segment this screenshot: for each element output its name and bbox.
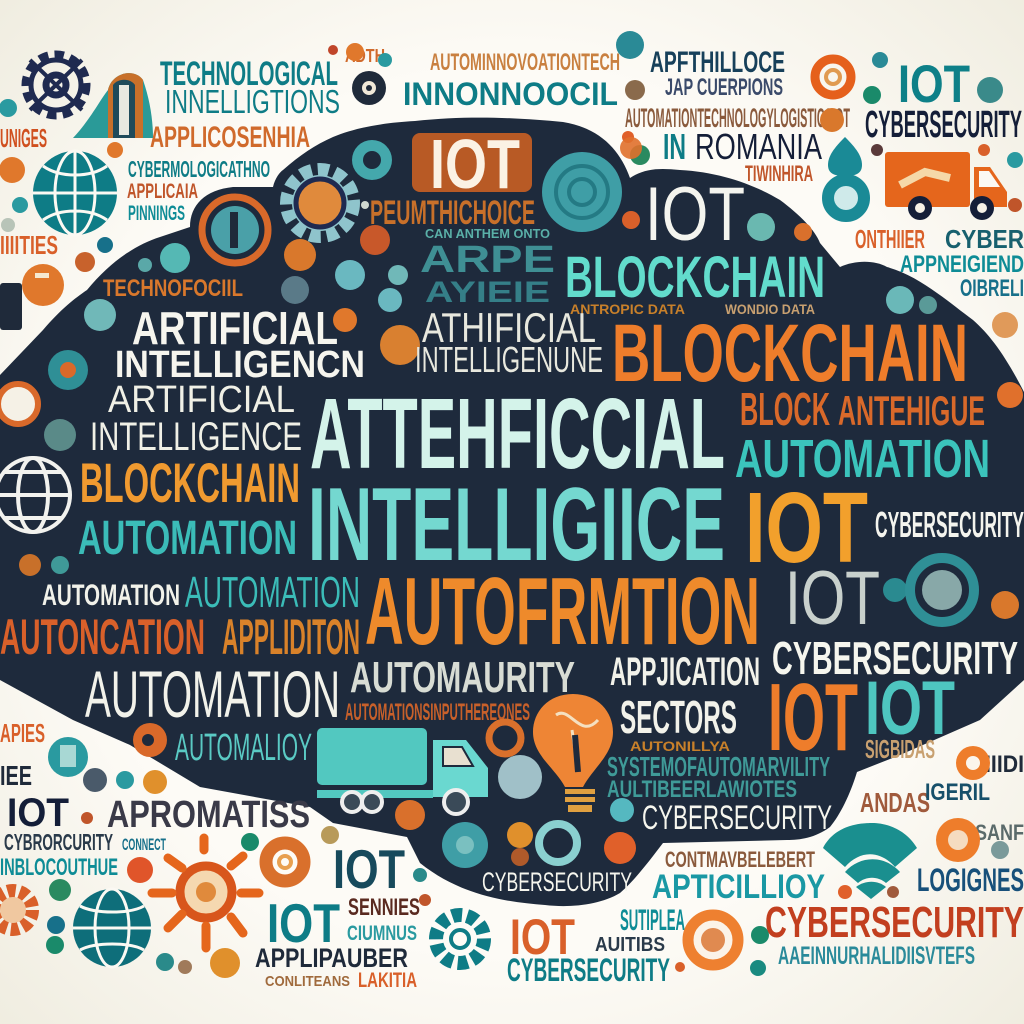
icon: orange seal bottom (266, 843, 304, 881)
small background word clutter: AUITIBS (595, 934, 665, 956)
label: APPLICATION: APPJICATION (610, 650, 760, 694)
label: ARTIFICIAL white 1: ARTIFICIAL (132, 302, 338, 354)
label: IOT teal lower: IOT (865, 666, 955, 751)
label: IOT bottom centre: IOT (333, 838, 405, 900)
label: IOT white: IOT (645, 172, 745, 257)
label: IN Romania: IN (663, 126, 686, 167)
small background word clutter: CYBRORCURITY (4, 829, 113, 855)
label: IOT grey: IOT (785, 556, 880, 641)
icon: small circles lower cloud (442, 722, 577, 868)
colour clutter inside cloud: CAN ANTHEM ONTO (425, 226, 550, 241)
small background word clutter: UNIGES (0, 123, 47, 153)
label: AUTOMATION small teal: AUTOMATION (185, 568, 360, 617)
label: AUTOMATION left teal: AUTOMATION (78, 512, 297, 565)
label: TECHNOFOCIIL: TECHNOFOCIIL (103, 275, 243, 302)
icon: building arch (73, 73, 153, 138)
label: IOT amber: IOT (745, 472, 868, 584)
main title line 1: ATTEHFICCIAL (310, 378, 725, 490)
label: SECTORS: SECTORS (620, 691, 737, 743)
icon: orange seal lower right (936, 818, 980, 862)
icon: teal circle lower left (48, 737, 88, 777)
small background word clutter: ANDAS (860, 787, 930, 818)
icon: small teal circle top cloud (352, 140, 392, 180)
icon: dark device left edge (0, 283, 22, 330)
label: APROMATISS: APROMATISS (107, 794, 310, 836)
icon: wifi arcs (823, 823, 917, 899)
icon: gear top left (27, 56, 85, 114)
colour clutter inside cloud: AYIEIE (425, 276, 550, 309)
colour clutter inside cloud: PEUMTHICHOICE (370, 194, 535, 232)
colour clutter inside cloud (19, 137, 1023, 866)
main title line 2: INTELLIGIICE (308, 467, 725, 583)
label: CYBERSECURITY cloud bottom: CYBERSECURITY (482, 867, 632, 897)
dark central cloud (0, 118, 1024, 906)
label: INNONNOOCIL: INNONNOOCIL (403, 76, 618, 112)
icon: orange seal top right (815, 59, 851, 95)
small background word clutter: APPLICOSENHIA (150, 121, 310, 154)
label: APTICILLIOY: APTICILLIOY (652, 868, 825, 906)
small background word clutter: IGERIL (925, 779, 990, 806)
colour clutter inside cloud: AUTOMATIONSINPUTHEREONES (345, 699, 530, 726)
label: IOT top right: IOT (898, 55, 970, 114)
label: BLOCKCHAIN teal: BLOCKCHAIN (565, 245, 825, 310)
icon: droplet (828, 137, 864, 216)
word cloud infographic: APPLIDITON (222, 609, 360, 665)
heading: TECHNOLOGICAL: TECHNOLOGICAL (160, 55, 338, 93)
small background word clutter: IEE (0, 760, 32, 791)
small background word clutter: IIIITIES (0, 230, 58, 260)
small background word clutter: APIES (0, 718, 45, 748)
label: APPLIPAUBER: APPLIPAUBER (255, 943, 408, 973)
label: IOT badge: IOT (430, 125, 520, 203)
icon: orange ring in cloud (202, 197, 268, 263)
icon: orange light bulb (533, 694, 613, 812)
icon: globe left (0, 458, 70, 532)
icon: teal gear right in cloud (910, 558, 974, 622)
label: INTELLIGENCE white 1: INTELLIGENCN (115, 344, 365, 386)
icon: orange target bottom (688, 915, 738, 965)
small background word clutter: ADTH (345, 46, 385, 66)
icon: globe bottom (73, 889, 151, 967)
label: AUTOMATION small white: AUTOMATION (42, 579, 180, 612)
colour clutter inside cloud: SYSTEMOFAUTOMARVILITY (607, 751, 830, 782)
small background word clutter: CONTMAVBELEBERT (665, 847, 815, 872)
icon: teal gear bottom (436, 915, 484, 963)
icon: pale gear in cloud (287, 170, 353, 236)
label: AUTOMALIOY: AUTOMALIOY (175, 727, 312, 769)
label: APFTHILLOCE: APFTHILLOCE (650, 46, 785, 79)
small background word clutter: LAKITIA (358, 969, 417, 992)
icon: orange seal right (956, 746, 990, 780)
label: JAP CUERPIONS: JAP CUERPIONS (665, 74, 783, 101)
icon: orange delivery truck (885, 152, 1007, 220)
icon: small teal circle bottom (47, 916, 65, 934)
icon: orange ring left edge (0, 384, 38, 424)
small background word clutter: CONLITEANS (265, 973, 350, 990)
label: AUTOMATION large white: AUTOMATION (85, 657, 340, 731)
small background word clutter: CONNECT (122, 835, 166, 854)
icon: dark magnifier top (352, 71, 386, 105)
icon: teal target in cloud (542, 152, 622, 232)
label: INTELLIGENUNE thin: INTELLIGENUNE (415, 339, 603, 380)
small background word clutter: SENNIES (348, 894, 420, 921)
label: IOT orange bottom: IOT (510, 909, 575, 965)
small background word clutter: SUTIPLEA (620, 904, 685, 937)
label: IN Romania (663, 126, 822, 167)
label: CYBERSECURITY teal bottom: CYBERSECURITY (507, 952, 670, 988)
small background word clutter: APPLICAIA (127, 180, 198, 203)
small background word clutter: AUTOMINNOVOATIONTECH (430, 49, 620, 76)
label: ATHIFICIAL thin: ATHIFICIAL (422, 304, 596, 351)
label: IOT bottom: IOT (267, 892, 340, 954)
label: AUTOMAURITY: AUTOMAURITY (350, 653, 575, 702)
small background word clutter: PINNINGS (128, 202, 185, 225)
label: BLOCKCHAIN left: BLOCKCHAIN (80, 451, 300, 514)
icon: glowing badge behind IOT (412, 133, 532, 192)
small background word clutter: CYBERMOLOGICATHNO (128, 156, 270, 182)
label: BLOCK: BLOCK (740, 383, 830, 435)
colour clutter inside cloud: ANTROPIC DATA (570, 301, 685, 317)
label: AUTONCATION orange: AUTONCATION (0, 609, 205, 665)
small background word clutter: CIUMNUS (347, 922, 417, 945)
label: CYBERSECURITY lower cloud: CYBERSECURITY (642, 799, 832, 837)
label: IN Romania: ROMANIA (695, 126, 822, 167)
small background word clutter: INBLOCOUTHUE (0, 854, 118, 881)
label: IOT orange lower: IOT (768, 664, 858, 771)
label: INTELLIGENCE white 2: INTELLIGENCE (90, 415, 302, 459)
colour clutter inside cloud: SIGBIDAS (865, 734, 935, 764)
icon: orange smile badge left (22, 264, 64, 306)
icon: orange seal lower left (133, 723, 167, 757)
label: IOT bottom left: IOT (7, 791, 69, 835)
heading: INNELLIGTIONS: INNELLIGTIONS (165, 83, 340, 120)
colour clutter inside cloud: ARPE (420, 239, 555, 281)
colour clutter inside cloud: AULTIBEERLAWIOTES (607, 776, 797, 803)
label: ARTIFICIAL white 2: ARTIFICIAL (108, 379, 295, 421)
small background word clutter: TIWINHIRA (745, 161, 813, 186)
colour clutter inside cloud: WONDIO DATA (725, 301, 815, 317)
icon: teal circle left (48, 350, 88, 390)
icon: teal truck in cloud (317, 728, 488, 814)
icon: orange sun (152, 838, 259, 948)
icon: orange gear bottom left (0, 891, 32, 929)
small background word clutter: ONTHIIER (855, 224, 925, 254)
icon: globe top left (33, 151, 117, 235)
colour clutter inside cloud: AUTONILLYA (630, 738, 730, 754)
